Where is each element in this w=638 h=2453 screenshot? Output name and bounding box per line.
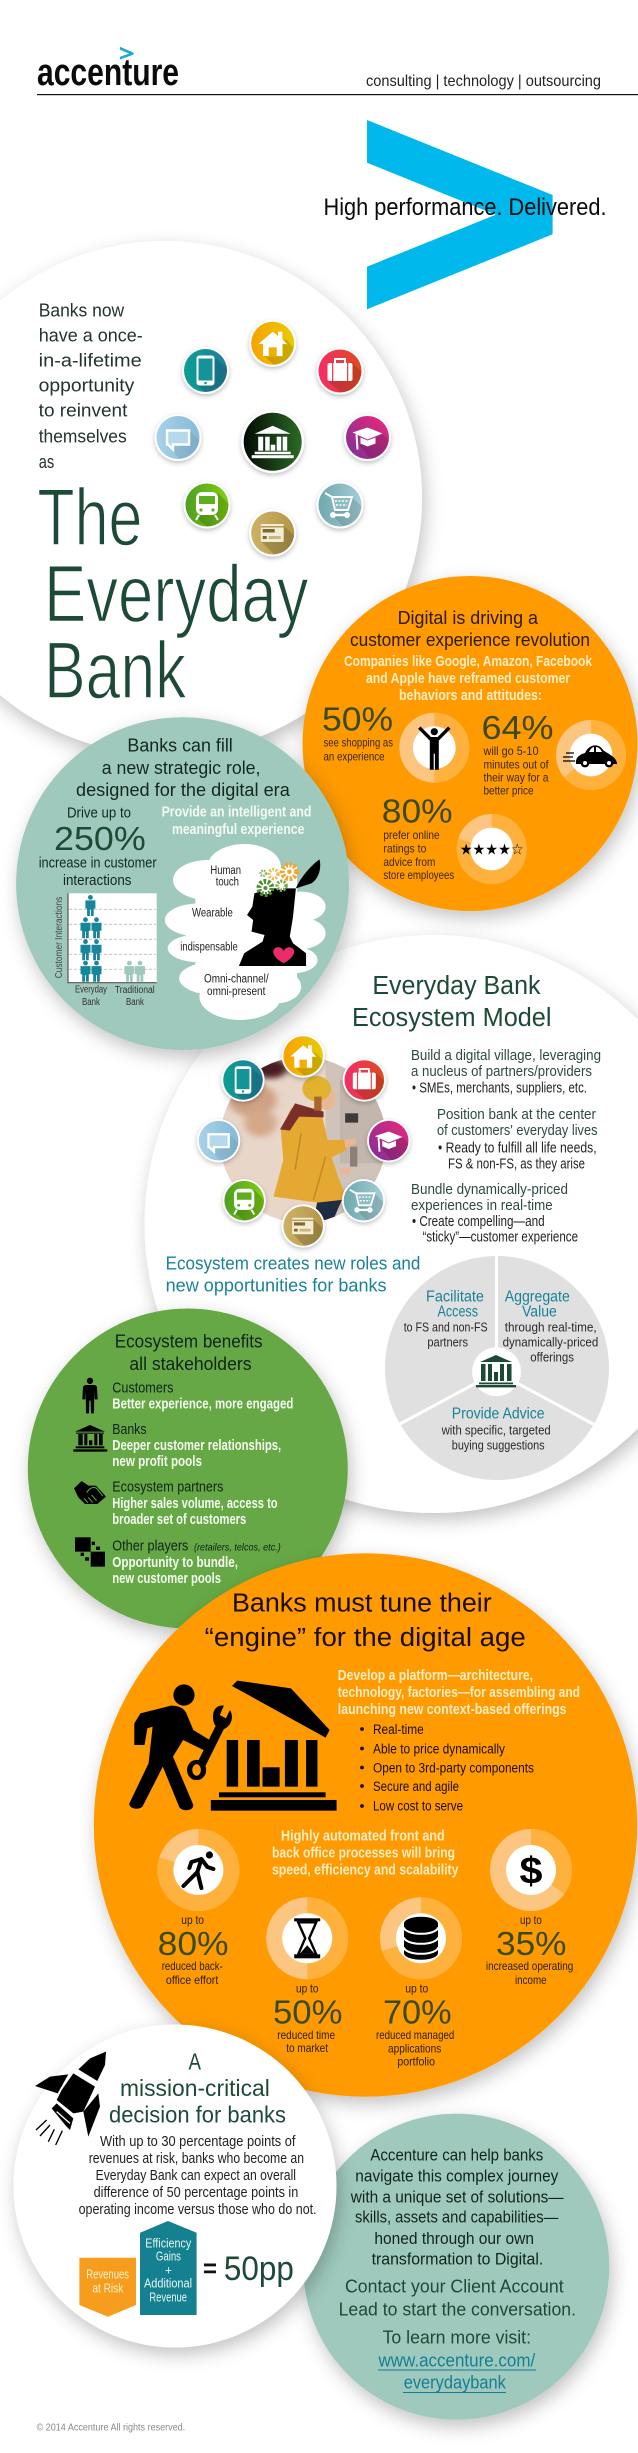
heading: customer experience revolution (350, 629, 590, 650)
text block: develop a platform: technology, factories—for assembling and (338, 1685, 580, 1701)
benefit: other players: Opportunity to bundle, (112, 1555, 238, 1571)
stat: 80% ratings: ratings to (383, 841, 427, 855)
icon: suitcase (343, 1058, 394, 1109)
text block: digital village (411, 1048, 601, 1097)
benefit: ecosystem partners: Higher sales volume, access to (112, 1496, 278, 1512)
heading: all stakeholders (129, 1353, 252, 1374)
heading: “engine” for the digital age (205, 1624, 526, 1652)
illustration: thought cloud with head: touch (216, 877, 239, 889)
stat: 70% applications: reduced managed (376, 2028, 454, 2042)
text block: digital village: a nucleus of partners/providers (411, 1064, 592, 1080)
benefit: customers (112, 1381, 293, 1413)
icon: bank (73, 1425, 107, 1452)
heading: Ecosystem benefits (115, 1330, 262, 1351)
stat: 250% interactions: 250% (54, 820, 146, 857)
text block: bundle experiences: Bundle dynamically-priced (411, 1182, 568, 1198)
subheading: new roles: new opportunities for banks (166, 1275, 387, 1296)
text block: help: transformation to Digital. (372, 2250, 543, 2269)
link: accenture url: www.accenture.com/ (378, 2350, 536, 2371)
benefit: other players: (retailers, telcos, etc.) (194, 1543, 281, 1554)
icon: train (223, 1179, 274, 1230)
icon: dollar donut 35%: $ (520, 1850, 542, 1892)
heading: A (188, 2048, 202, 2074)
illustration: thought cloud with head: indispensable (180, 942, 238, 954)
diagram: three roles pie: Value (522, 1304, 557, 1321)
stat: 80% ratings: 80% (382, 793, 453, 830)
text block: highly automated: Highly automated front and (281, 1829, 445, 1845)
chart: customer interactions pictogram: Bank (82, 997, 101, 1008)
text block: contact: To learn more visit: (383, 2326, 531, 2347)
heading: decision for banks (109, 2102, 286, 2128)
text block: revenue difference: With up to 30 percentage points of (100, 2134, 296, 2150)
heading: Banks must tune their (232, 1590, 492, 1618)
chart: customer interactions pictogram: Bank (126, 997, 145, 1008)
diagram: three roles pie: Provide Advice (452, 1405, 545, 1422)
benefit: ecosystem partners: Ecosystem partners (112, 1480, 223, 1496)
benefit: other players (112, 1539, 281, 1587)
text block: revenue difference: revenues at risk, banks who become an (89, 2151, 304, 2167)
subheading: new roles: Ecosystem creates new roles and (166, 1252, 420, 1273)
icon: car donut 64% (556, 720, 626, 790)
subheading: behaviors and attitudes: (399, 687, 542, 704)
benefit: other players: Other players (112, 1539, 188, 1555)
icon: credit card (249, 510, 305, 565)
stat: 35% income (486, 1913, 573, 1987)
diagram: three roles pie: through real-time, (505, 1320, 597, 1335)
icon: graduation cap (344, 414, 400, 470)
heading (76, 735, 290, 800)
diagram: three roles pie: Facilitate (426, 1289, 484, 1306)
icon: suitcase (316, 348, 372, 403)
stat: 64% price: better price (484, 783, 534, 797)
subheading: and Apple have reframed customer (366, 670, 570, 687)
heading: a new strategic role, (102, 757, 260, 778)
stat: 250% interactions: Drive up to (67, 804, 131, 821)
arrow: efficiency gains and additional revenue: Gains (156, 2250, 181, 2264)
bullet list: Open to 3rd-party components (373, 1760, 534, 1775)
stat: 250% interactions: interactions (63, 872, 132, 889)
panel: ecosystem model (144, 935, 638, 1513)
benefit: customers: Customers (112, 1381, 173, 1397)
stat: 64% price: minutes out of (484, 757, 549, 771)
result: equals 50pp: = (203, 2253, 217, 2283)
text block: contact: Lead to start the conversation. (339, 2299, 576, 2320)
intro text: themselves (39, 426, 127, 447)
heading: designed for the digital era (76, 779, 290, 800)
text block: help: Accenture can help banks (370, 2146, 543, 2165)
panel: digital customer experience revolution (302, 576, 638, 911)
arrow: efficiency gains and additional revenue (140, 2221, 197, 2315)
icon: chat (197, 1119, 248, 1170)
stat: 50% time to market: up to (296, 1981, 319, 1995)
stat: 35% income: 35% (496, 1925, 566, 1962)
benefit: customers: Better experience, more engaged (112, 1397, 293, 1413)
text block: position bank: FS & non-FS, as they arise (448, 1156, 585, 1172)
stat: 50% time to market (273, 1981, 342, 2055)
stat: 64% price (482, 709, 554, 797)
stat: 50% time to market: to market (286, 2041, 329, 2055)
diagram: three roles pie: Aggregate (505, 1289, 570, 1306)
icon: dollar donut 35% (490, 1829, 572, 1911)
diagram: three roles pie: offerings (530, 1350, 574, 1365)
stat: 80% ratings: prefer online (383, 828, 440, 842)
heading (352, 972, 552, 1032)
stat: 50% shopping (322, 701, 393, 764)
panel: intro white circle (0, 241, 422, 755)
panel: new strategic role (16, 717, 349, 1050)
panel: contact accenture (303, 2114, 609, 2420)
illustration: worker repairing bank (129, 1681, 337, 1811)
heading: Ecosystem Model (352, 1004, 552, 1032)
heading (350, 607, 590, 650)
icon: customer (82, 1378, 98, 1413)
diagram: three roles pie: Access (438, 1304, 478, 1321)
intro text: in-a-lifetime (39, 350, 142, 371)
text block: digital village: Build a digital village, leveraging (411, 1048, 601, 1064)
text block: contact (339, 2276, 576, 2347)
icon: home (282, 1034, 333, 1085)
intro text: to reinvent (39, 400, 127, 421)
icon: central bank (241, 410, 304, 473)
arrow: efficiency gains and additional revenue: Revenue (149, 2291, 187, 2305)
icon: train (184, 482, 239, 537)
stat: 50% shopping: an experience (324, 750, 385, 764)
link: accenture url (378, 2350, 536, 2393)
benefit: banks (112, 1422, 281, 1470)
icon: credit card (282, 1204, 333, 1255)
icon: bank (476, 1355, 516, 1387)
benefit: banks: Banks (112, 1422, 146, 1438)
arrow: revenues at risk (79, 2258, 136, 2317)
stat: 64% price: will go 5-10 (483, 744, 539, 758)
bullet list: Able to price dynamically (373, 1741, 505, 1756)
stat: 80% ratings (382, 793, 454, 882)
icon: chat (154, 414, 210, 470)
heading: Digital is driving a (398, 607, 539, 628)
icon: runner donut 80% (157, 1829, 239, 1911)
text block: help: with a unique set of solutions— (350, 2187, 564, 2206)
bullet list: Real-time (373, 1722, 424, 1737)
benefit: other players: new customer pools (112, 1571, 221, 1587)
stat: 80% back-office: reduced back- (162, 1959, 223, 1973)
icon: handshake (74, 1481, 106, 1504)
stat: 70% applications (376, 1981, 454, 2069)
title: The Everyday Bank: Bank (44, 626, 187, 716)
stat: 80% ratings: advice from (383, 855, 435, 869)
header tagline: consulting | technology | outsourcing (366, 73, 601, 90)
panel: mission-critical decision (14, 2024, 336, 2348)
arrow: efficiency gains and additional revenue: Additional (144, 2277, 192, 2291)
chart: customer interactions pictogram: Traditional (115, 985, 155, 996)
text block: position bank: of customers' everyday lives (437, 1123, 598, 1139)
stat: 250% interactions: increase in customer (39, 855, 157, 872)
intro text: have a once- (39, 325, 143, 346)
stat: 64% price: 64% (482, 709, 554, 746)
accenture blue chevron (367, 120, 553, 309)
benefit: ecosystem partners (112, 1480, 278, 1528)
subheading: intelligent experience: Provide an intelligent and (162, 804, 311, 821)
result: equals 50pp: 50pp (224, 2250, 294, 2288)
text block: help: navigate this complex journey (355, 2167, 559, 2186)
bullet list: Low cost to serve (373, 1799, 463, 1814)
icon: cart (342, 1179, 393, 1230)
stat: 70% applications: applications (388, 2042, 441, 2056)
text block: develop a platform (338, 1668, 580, 1718)
arrow: revenues at risk: at Risk (92, 2281, 124, 2295)
text block: bundle experiences: “sticky”—customer experience (422, 1230, 578, 1246)
text block: position bank: • Ready to fulfill all life needs, (438, 1141, 597, 1157)
bullet list (360, 1722, 534, 1814)
stat: 70% applications: up to (405, 1981, 429, 1995)
text block: position bank (437, 1107, 598, 1172)
stat: 80% back-office: up to (181, 1913, 204, 1927)
intro text: Banks now (39, 300, 125, 321)
stat: 80% back-office (158, 1913, 229, 1987)
stat: 80% ratings: store employees (383, 868, 454, 882)
text block: digital village: • SMEs, merchants, suppliers, etc. (412, 1081, 587, 1097)
copyright: © 2014 Accenture All rights reserved. (37, 2422, 185, 2434)
stat: 70% applications: 70% (383, 1993, 452, 2030)
chart: customer interactions pictogram: Everyday (75, 985, 107, 996)
text block: develop a platform: launching new context-based offerings (338, 1702, 566, 1718)
stat: 50% shopping: see shopping as (324, 736, 393, 750)
icon: rocket (35, 2052, 106, 2145)
icon: phone (182, 347, 238, 400)
text block: develop a platform: Develop a platform—architecture, (338, 1668, 533, 1684)
text block: highly automated (272, 1829, 458, 1879)
intro text (39, 300, 143, 472)
text block: bundle experiences (411, 1182, 578, 1246)
stat: 50% shopping: 50% (322, 701, 393, 738)
heading (109, 2048, 286, 2128)
text block: bundle experiences: • Create compelling—and (412, 1214, 545, 1230)
stat: 64% price: their way for a (484, 771, 549, 785)
text block: revenue difference (79, 2134, 317, 2218)
title: The Everyday Bank: The (37, 473, 142, 563)
stat: 35% income: increased operating (486, 1959, 573, 1973)
text block: highly automated: back office processes will bring (272, 1846, 455, 1862)
text block: revenue difference: difference of 50 percentage points in (94, 2185, 298, 2201)
icon: person donut 50% (399, 713, 469, 783)
text block: position bank: Position bank at the center (437, 1107, 596, 1123)
subheading: new roles (166, 1252, 420, 1296)
stat: 35% income: income (515, 1973, 547, 1987)
stat: 80% back-office: office effort (166, 1973, 219, 1987)
illustration: thought cloud with head (165, 844, 326, 1020)
illustration: thought cloud with head: omni-present (207, 986, 266, 998)
stat: 250% interactions (39, 804, 157, 889)
stat: 50% time to market: 50% (273, 1993, 342, 2030)
icon: star rating donut 80% (457, 814, 527, 884)
icon: phone (221, 1058, 272, 1108)
stat: 35% income: up to (520, 1913, 542, 1927)
chart: customer interactions pictogram (53, 893, 157, 1008)
intro text: as (39, 451, 54, 472)
diagram: three roles pie (385, 1250, 609, 1480)
icon: graduation cap (367, 1119, 418, 1170)
heading: Banks can fill (127, 735, 233, 756)
bullet list: Secure and agile (373, 1779, 459, 1794)
intro text: opportunity (39, 375, 135, 396)
panel: tune the engine (94, 1553, 637, 2097)
diagram: three roles pie: with specific, targeted (441, 1422, 551, 1437)
arrow: efficiency gains and additional revenue: + (165, 2263, 172, 2277)
title: The Everyday Bank: Everyday (44, 550, 309, 640)
chart: customer interactions pictogram: Customer Interactions (53, 897, 65, 978)
heading: Everyday Bank (372, 972, 541, 1000)
heading: mission-critical (120, 2075, 270, 2101)
diagram: three roles pie: partners (427, 1335, 468, 1350)
text block: revenue difference: Everyday Bank can expect an overall (96, 2168, 296, 2184)
icon: home (249, 320, 305, 375)
stat: 80% back-office: 80% (158, 1925, 229, 1962)
arrow: efficiency gains and additional revenue: Efficiency (145, 2237, 192, 2251)
benefit: banks: Deeper customer relationships, (112, 1438, 281, 1454)
icon: hourglass donut 50% (266, 1897, 348, 1979)
heading (115, 1330, 262, 1374)
diagram: three roles pie: buying suggestions (452, 1437, 545, 1452)
illustration: thought cloud with head: Wearable (192, 908, 233, 920)
header logo: accenture: accenture (37, 52, 179, 94)
text block: help (350, 2146, 564, 2269)
text block: contact: Contact your Client Account (345, 2276, 564, 2297)
diagram: three roles pie: to FS and non-FS (404, 1320, 488, 1335)
stat: 50% time to market: reduced time (277, 2028, 335, 2042)
benefit: banks: new profit pools (112, 1454, 202, 1470)
icon: cart (316, 482, 372, 537)
icon: star rating donut 80%: ★★★★☆ (460, 840, 524, 858)
illustration: thought cloud with head: Omni-channel/ (204, 973, 269, 985)
illustration: thought cloud with head: Human (210, 865, 241, 877)
stat: 70% applications: portfolio (397, 2055, 435, 2069)
panel: ecosystem benefits (28, 1308, 348, 1628)
heading (205, 1590, 526, 1652)
text block: bundle experiences: experiences in real-time (411, 1198, 553, 1214)
link: accenture url: everydaybank (404, 2371, 507, 2392)
benefit: ecosystem partners: broader set of customers (112, 1512, 246, 1528)
text block: revenue difference: operating income versus those who do not. (79, 2202, 317, 2218)
icon: puzzle pieces (75, 1537, 105, 1567)
subheading: intelligent experience (162, 804, 311, 838)
title: The Everyday Bank (37, 473, 309, 716)
text block: highly automated: speed, efficiency and scalability (272, 1863, 458, 1879)
subheading (344, 653, 593, 704)
text block: help: skills, assets and capabilities— (355, 2208, 558, 2227)
arrow: revenues at risk: Revenues (86, 2267, 129, 2281)
photo: woman at ATM (222, 1060, 384, 1220)
slogan: High performance. Delivered. (324, 194, 606, 221)
diagram: three roles pie: dynamically-priced (503, 1335, 598, 1350)
text block: help: honed through our own (374, 2229, 534, 2248)
icon: database donut 70% (380, 1897, 462, 1979)
subheading: intelligent experience: meaningful experience (172, 821, 304, 838)
